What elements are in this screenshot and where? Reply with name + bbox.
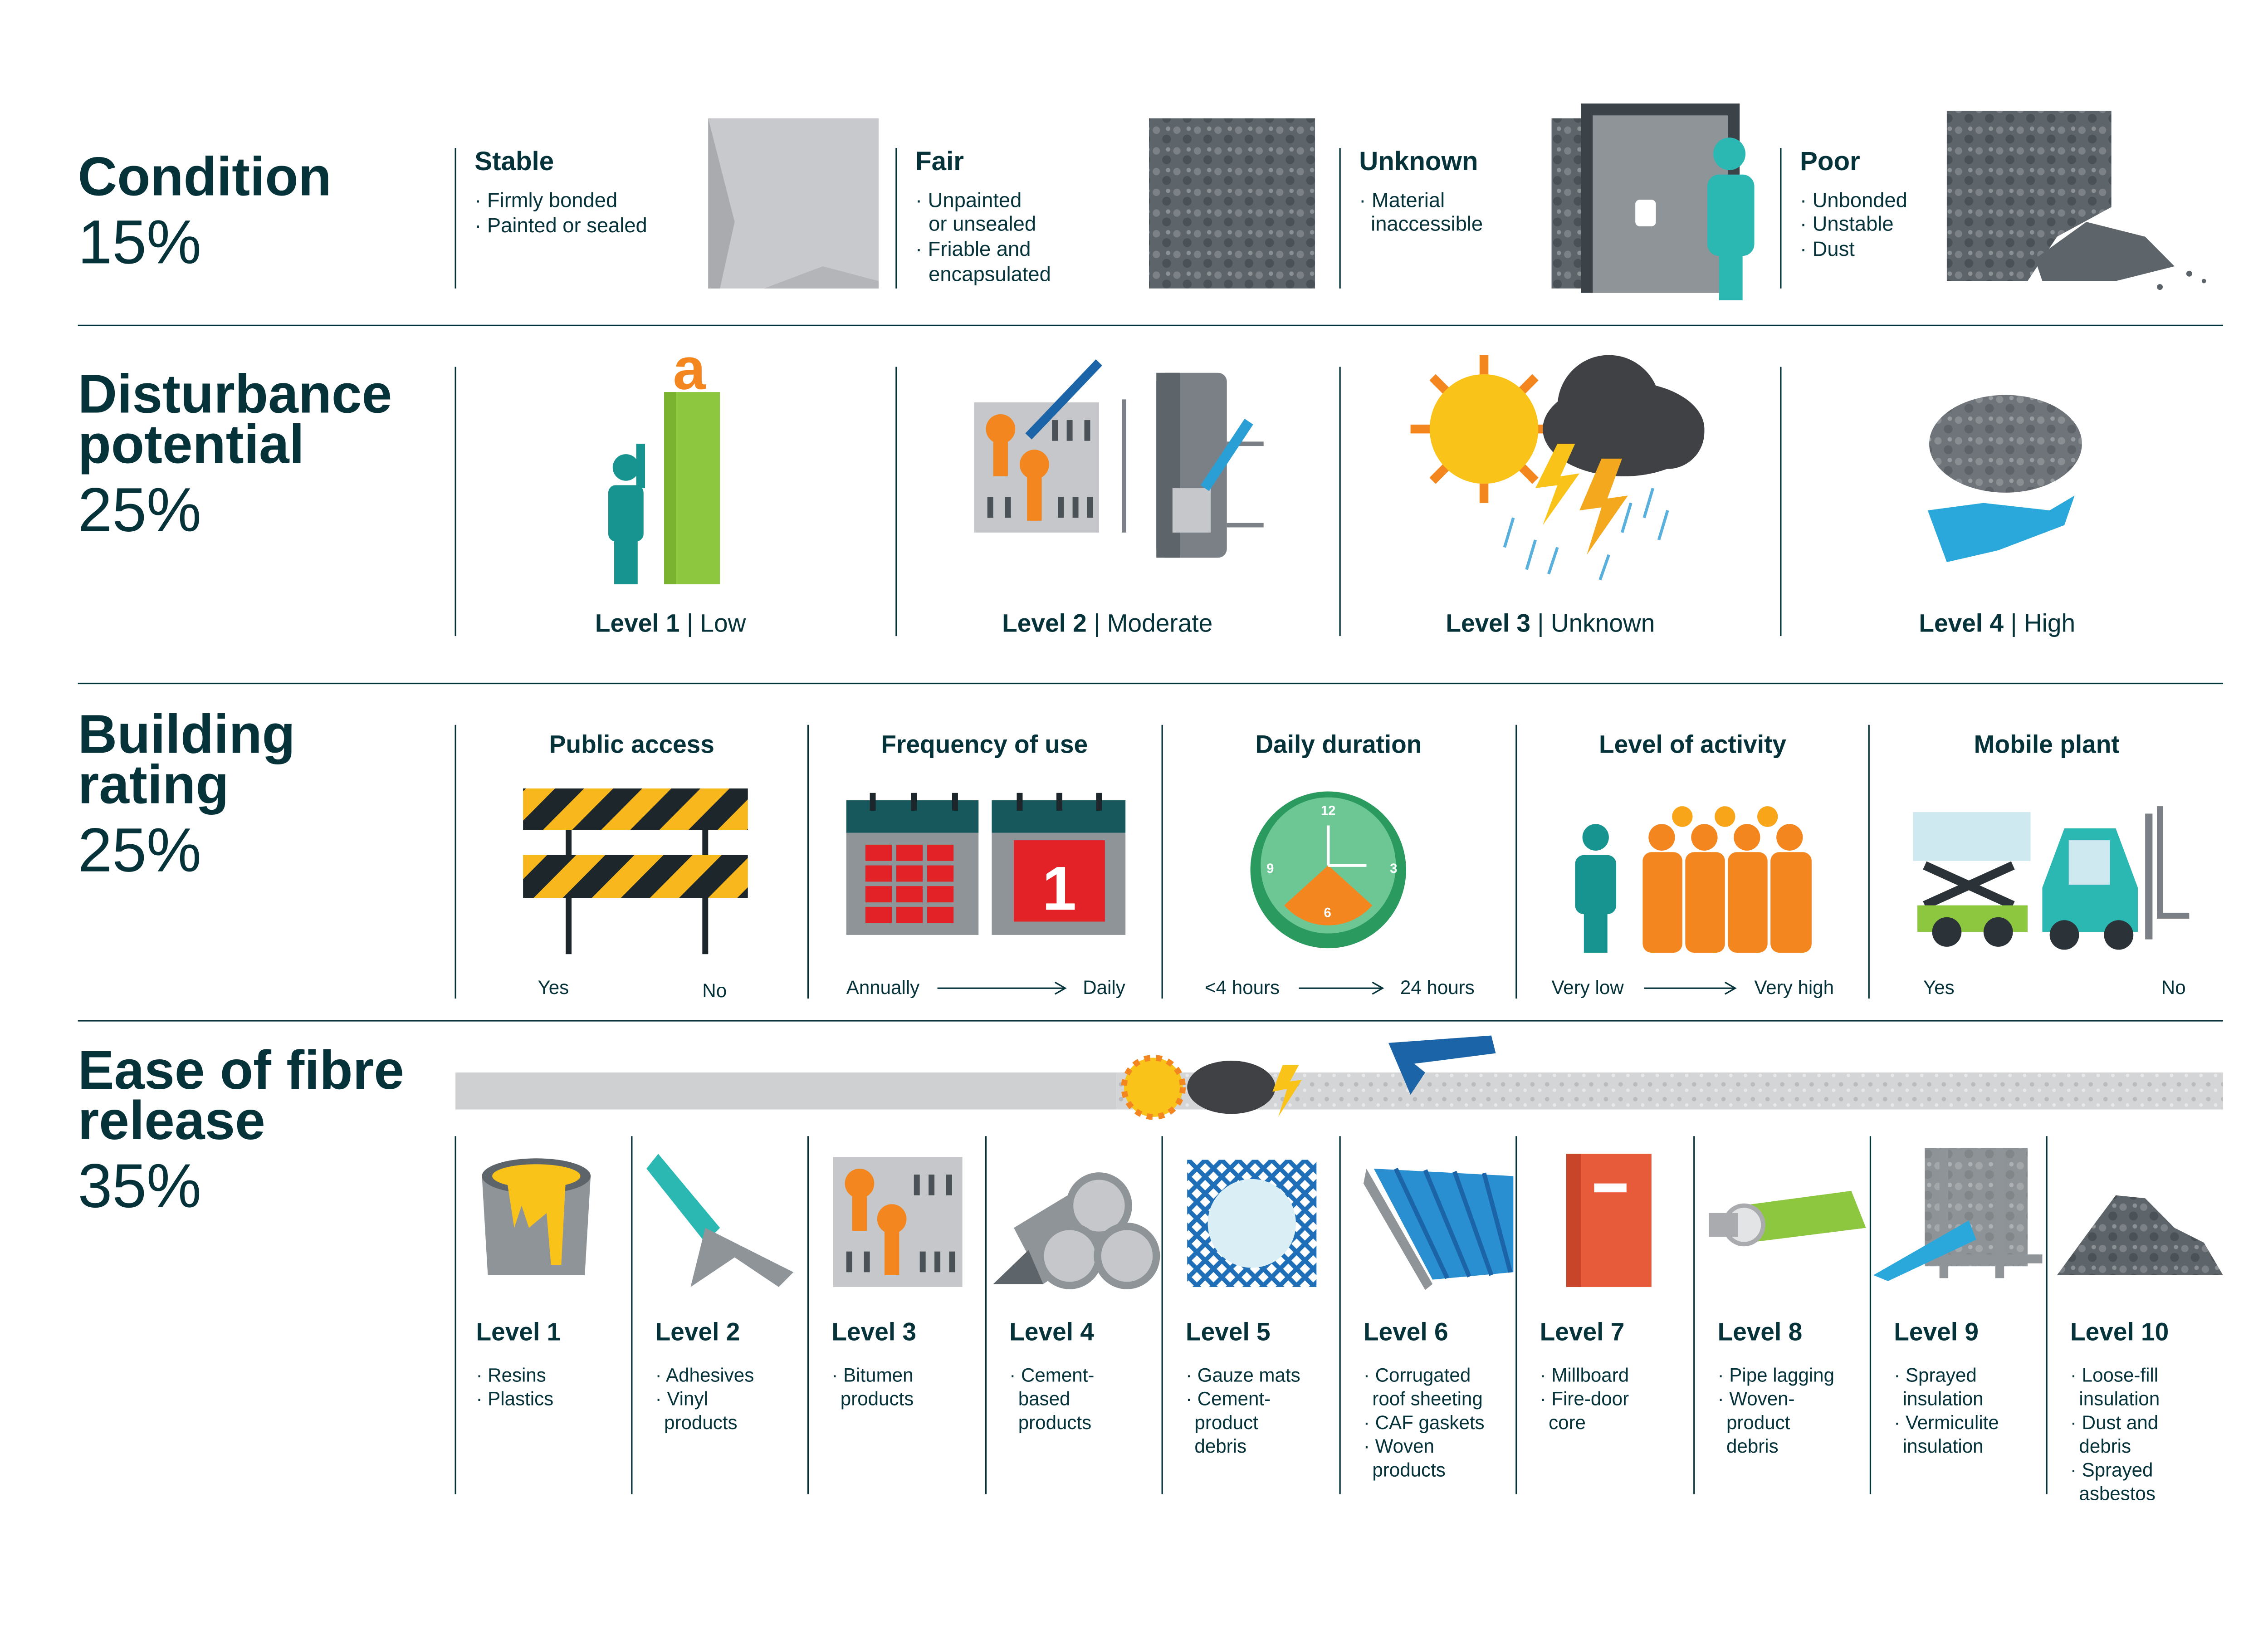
panel: frequency of use: 1	[1042, 853, 1076, 923]
icon: door	[1552, 103, 1755, 300]
level texts: · Gauze mats	[1186, 1364, 1300, 1386]
dividers	[78, 325, 2223, 1021]
level texts: · CAF gaskets	[1364, 1412, 1485, 1433]
unknown text: inaccessible	[1371, 212, 1483, 235]
panel: public access: Yes	[538, 977, 569, 998]
level texts: debris	[1194, 1435, 1246, 1457]
level texts: · Adhesives	[655, 1364, 754, 1386]
section: building rating	[78, 704, 2189, 1001]
level texts: core	[1549, 1412, 1586, 1433]
level texts: · Plastics	[476, 1388, 553, 1410]
level texts: · Woven	[1364, 1435, 1434, 1457]
title: disturbance: 25%	[78, 475, 201, 544]
panel: mobile plant: Mobile plant	[1974, 730, 2120, 759]
level texts: · Millboard	[1540, 1364, 1629, 1386]
fair text: Fair	[915, 147, 964, 176]
level texts: · Fire-door	[1540, 1388, 1629, 1410]
panel: public access	[523, 730, 748, 1001]
stable text: Stable	[474, 147, 554, 176]
level texts: Level 10	[2070, 1317, 2169, 1346]
fair text: encapsulated	[929, 262, 1051, 286]
poor text: · Unbonded	[1800, 188, 1907, 212]
level texts: · Loose-fill	[2070, 1364, 2158, 1386]
level texts: insulation	[2079, 1388, 2160, 1410]
level texts: Level 3	[831, 1317, 916, 1346]
icon: sprayed insulation	[1873, 1148, 2042, 1281]
icon: pipes	[993, 1176, 1156, 1286]
level texts: Level 6	[1364, 1317, 1448, 1346]
bar: release scale	[455, 1036, 2223, 1117]
level texts: products	[1372, 1459, 1446, 1480]
level texts: · Pipe lagging	[1718, 1364, 1834, 1386]
level texts: · Resins	[476, 1364, 546, 1386]
panel: level of activity: Very low	[1552, 977, 1624, 998]
level texts: Level 1	[476, 1317, 561, 1346]
icon: level 3 weather	[1411, 355, 1704, 580]
title: ease of fibre release	[78, 1040, 404, 1220]
icon: fair textured sheet	[1149, 118, 1315, 289]
unknown text: Unknown	[1359, 147, 1478, 176]
level texts: asbestos	[2079, 1483, 2156, 1504]
level texts: roof sheeting	[1372, 1388, 1483, 1410]
title: ease of fibre release: 35%	[78, 1151, 201, 1220]
fair text: · Unpainted	[915, 188, 1022, 212]
poor text	[1800, 147, 1907, 260]
unknown text: · Material	[1359, 188, 1445, 212]
icon: bitumen panel	[833, 1157, 963, 1287]
section: disturbance	[78, 335, 2082, 637]
unknown text	[1359, 147, 1483, 235]
panel: level of activity	[1552, 730, 1834, 998]
level texts: insulation	[1903, 1388, 1984, 1410]
level texts: debris	[1726, 1435, 1779, 1457]
level texts: insulation	[1903, 1435, 1984, 1457]
panel: public access: Public access	[549, 730, 714, 759]
title: condition	[78, 146, 332, 277]
label: level 1: Level 1 | Low	[595, 609, 747, 637]
level texts: products	[1018, 1412, 1091, 1433]
panel: daily duration: 9	[1266, 862, 1274, 876]
level texts: · Sprayed	[2070, 1459, 2153, 1480]
title: condition: 15%	[78, 207, 201, 277]
panel: daily duration: Daily duration	[1255, 730, 1422, 759]
icon: stable sheet	[708, 118, 879, 289]
level texts: · Woven-	[1718, 1388, 1795, 1410]
label: level 3: Level 3 | Unknown	[1446, 609, 1655, 637]
stable text: · Firmly bonded	[474, 188, 617, 212]
level texts: · Sprayed	[1894, 1364, 1977, 1386]
panel: daily duration: 3	[1390, 862, 1397, 876]
icon: level 2 panel and boiler	[974, 362, 1264, 558]
stable text: · Painted or sealed	[474, 214, 647, 237]
panel: daily duration: 6	[1324, 906, 1331, 920]
title: building rating: rating	[78, 754, 229, 815]
icon: level 1 shelf	[608, 335, 720, 584]
poor text: Poor	[1800, 147, 1860, 176]
level texts: product	[1194, 1412, 1258, 1433]
panel: frequency of use: Annually	[846, 977, 920, 998]
title: building rating	[78, 704, 295, 885]
level texts: products	[841, 1388, 914, 1410]
level texts: · Dust and	[2070, 1412, 2158, 1433]
icon: pipe lagging	[1709, 1191, 1866, 1244]
section: condition	[78, 103, 2206, 300]
level texts	[476, 1317, 2169, 1504]
panel: daily duration: 24 hours	[1400, 977, 1475, 998]
panel: mobile plant: No	[2161, 977, 2186, 998]
section: ease of fibre release	[78, 1036, 2223, 1504]
level texts: products	[664, 1412, 738, 1433]
level texts: Level 9	[1894, 1317, 1979, 1346]
poor text: · Dust	[1800, 237, 1855, 260]
level texts: · Cement-	[1009, 1364, 1094, 1386]
panel: frequency of use	[846, 730, 1126, 998]
panel: daily duration	[1205, 730, 1475, 998]
icon: fire door	[1566, 1154, 1652, 1287]
level texts: Level 2	[655, 1317, 740, 1346]
level texts: · Vinyl	[655, 1388, 708, 1410]
level texts: Level 8	[1718, 1317, 1802, 1346]
fair text	[915, 147, 1051, 286]
label: level 4: Level 4 | High	[1919, 609, 2075, 637]
level texts: · Corrugated	[1364, 1364, 1471, 1386]
icon: gauze mat	[1187, 1160, 1316, 1287]
level texts: · Vermiculite	[1894, 1412, 1999, 1433]
fair text: · Friable and	[915, 237, 1031, 260]
level texts: Level 5	[1186, 1317, 1271, 1346]
panel: frequency of use: Daily	[1083, 977, 1126, 998]
panel: public access: No	[702, 980, 727, 1001]
level texts: · Cement-	[1186, 1388, 1271, 1410]
icon: sealant gun	[646, 1154, 793, 1287]
title: ease of fibre release: Ease of fibre	[78, 1040, 404, 1101]
icon: corrugated sheet	[1364, 1169, 1513, 1290]
panel: level of activity: Level of activity	[1599, 730, 1786, 759]
title: ease of fibre release: release	[78, 1090, 265, 1151]
title: condition: Condition	[78, 146, 332, 207]
panel: mobile plant	[1913, 730, 2189, 998]
level texts: based	[1018, 1388, 1070, 1410]
icon: paint tin	[482, 1158, 591, 1275]
icon: crumbling sheet	[1947, 111, 2206, 290]
level texts: debris	[2079, 1435, 2131, 1457]
panel: daily duration: <4 hours	[1205, 977, 1280, 998]
title: building rating: Building	[78, 704, 295, 765]
panel: mobile plant: Yes	[1923, 977, 1955, 998]
title: disturbance: Disturbance	[78, 363, 392, 425]
level texts: · Bitumen	[831, 1364, 913, 1386]
icon: loose-fill pile	[2057, 1195, 2223, 1275]
fair text: or unsealed	[929, 212, 1036, 235]
title: disturbance	[78, 363, 392, 544]
level texts: Level 7	[1540, 1317, 1624, 1346]
panel: frequency of use: Frequency of use	[881, 730, 1088, 759]
level texts: product	[1726, 1412, 1790, 1433]
poor text: · Unstable	[1800, 212, 1894, 235]
icon: level 1 shelf: a	[673, 335, 706, 402]
label: level 2: Level 2 | Moderate	[1002, 609, 1212, 637]
icon: level 4 hand with dust	[1928, 395, 2082, 562]
panel: level of activity: Very high	[1755, 977, 1834, 998]
level texts: Level 4	[1009, 1317, 1094, 1346]
stable text	[474, 147, 647, 237]
panel: daily duration: 12	[1321, 804, 1335, 818]
title: disturbance: potential	[78, 414, 304, 475]
title: building rating: 25%	[78, 815, 201, 885]
